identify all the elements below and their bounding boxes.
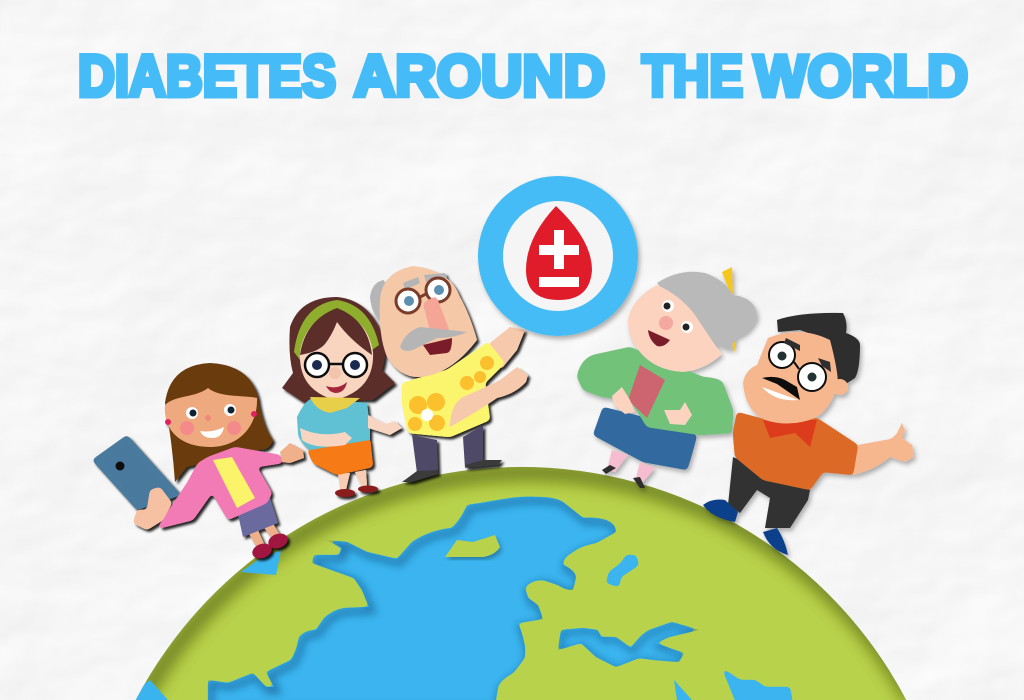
nose (329, 367, 341, 379)
head (380, 266, 477, 377)
trousers (412, 425, 483, 473)
mouth (648, 330, 670, 346)
glasses and eyes (769, 342, 826, 391)
glasses and eyes (305, 353, 367, 377)
mouth (423, 338, 452, 355)
character: grandmother (577, 267, 757, 488)
nose (205, 415, 211, 421)
nose (659, 316, 673, 330)
cardigan (157, 447, 283, 529)
drop (526, 206, 592, 300)
phone (92, 435, 181, 510)
collar (763, 420, 817, 447)
eyebrows (403, 273, 447, 290)
collar (310, 397, 360, 413)
hair (777, 313, 860, 393)
western water (241, 550, 281, 575)
legs (607, 450, 655, 482)
raised arm (490, 327, 525, 372)
title: AROUND (354, 44, 605, 109)
scarf (628, 365, 665, 418)
face (165, 388, 257, 447)
top (297, 398, 370, 450)
southern sea (724, 671, 792, 700)
inland sea (558, 622, 701, 670)
lake (606, 555, 639, 587)
phone camera (116, 462, 124, 470)
character: old man (370, 266, 528, 482)
forearm with hand (450, 367, 528, 427)
title (78, 44, 968, 109)
shirt (733, 412, 858, 490)
narrow strait (674, 680, 692, 700)
shoes (602, 465, 645, 488)
side hair (370, 280, 388, 325)
face (300, 310, 373, 400)
cardigan (577, 347, 733, 435)
eyes (662, 300, 693, 333)
globe top inner shadow (141, 472, 913, 700)
hands (612, 387, 692, 425)
moustache (400, 327, 467, 351)
shirt (402, 342, 505, 437)
character: woman with headband (282, 297, 402, 497)
title: THE (642, 44, 743, 109)
skirt (593, 407, 697, 470)
waving hand (280, 443, 304, 463)
arm with thumbs up (853, 423, 914, 475)
mouth (200, 427, 224, 438)
ear (832, 379, 848, 395)
lower left water (136, 680, 168, 700)
shirt flowers (408, 356, 494, 431)
legs (247, 522, 282, 550)
moustache (762, 377, 800, 400)
plus sign (539, 230, 579, 269)
cheeks (180, 421, 241, 435)
skirt (307, 438, 373, 475)
character: girl with phone (92, 363, 304, 561)
nose (423, 296, 450, 332)
hair (657, 272, 757, 350)
character: man with glasses (703, 313, 914, 555)
legs (338, 470, 367, 490)
shoes (335, 486, 378, 497)
mouth (326, 382, 347, 393)
face (743, 332, 838, 424)
hair back (165, 363, 273, 482)
shoes (402, 460, 502, 482)
minus sign (539, 277, 579, 287)
shoes (250, 531, 290, 561)
globe land base (136, 467, 906, 700)
title: WORLD (754, 44, 968, 109)
mouth (762, 387, 798, 400)
island in ocean (445, 535, 500, 557)
title: DIABETES (78, 44, 336, 109)
face (628, 285, 722, 372)
hair (282, 297, 395, 402)
hand on phone (133, 487, 172, 530)
earrings (165, 411, 257, 425)
shirt (213, 457, 255, 508)
ring (490, 188, 626, 324)
trousers (728, 457, 810, 528)
eyebrow (784, 338, 831, 372)
shoes (703, 500, 788, 555)
skirt (237, 498, 278, 537)
arms (300, 415, 402, 447)
glasses and eyes (396, 278, 450, 313)
globe (130, 467, 913, 700)
icon: blood drop ring (490, 188, 626, 324)
headband (294, 300, 379, 360)
bangs (300, 308, 372, 355)
eyes (186, 404, 236, 419)
ocean (208, 497, 619, 700)
hair pin (722, 267, 735, 352)
